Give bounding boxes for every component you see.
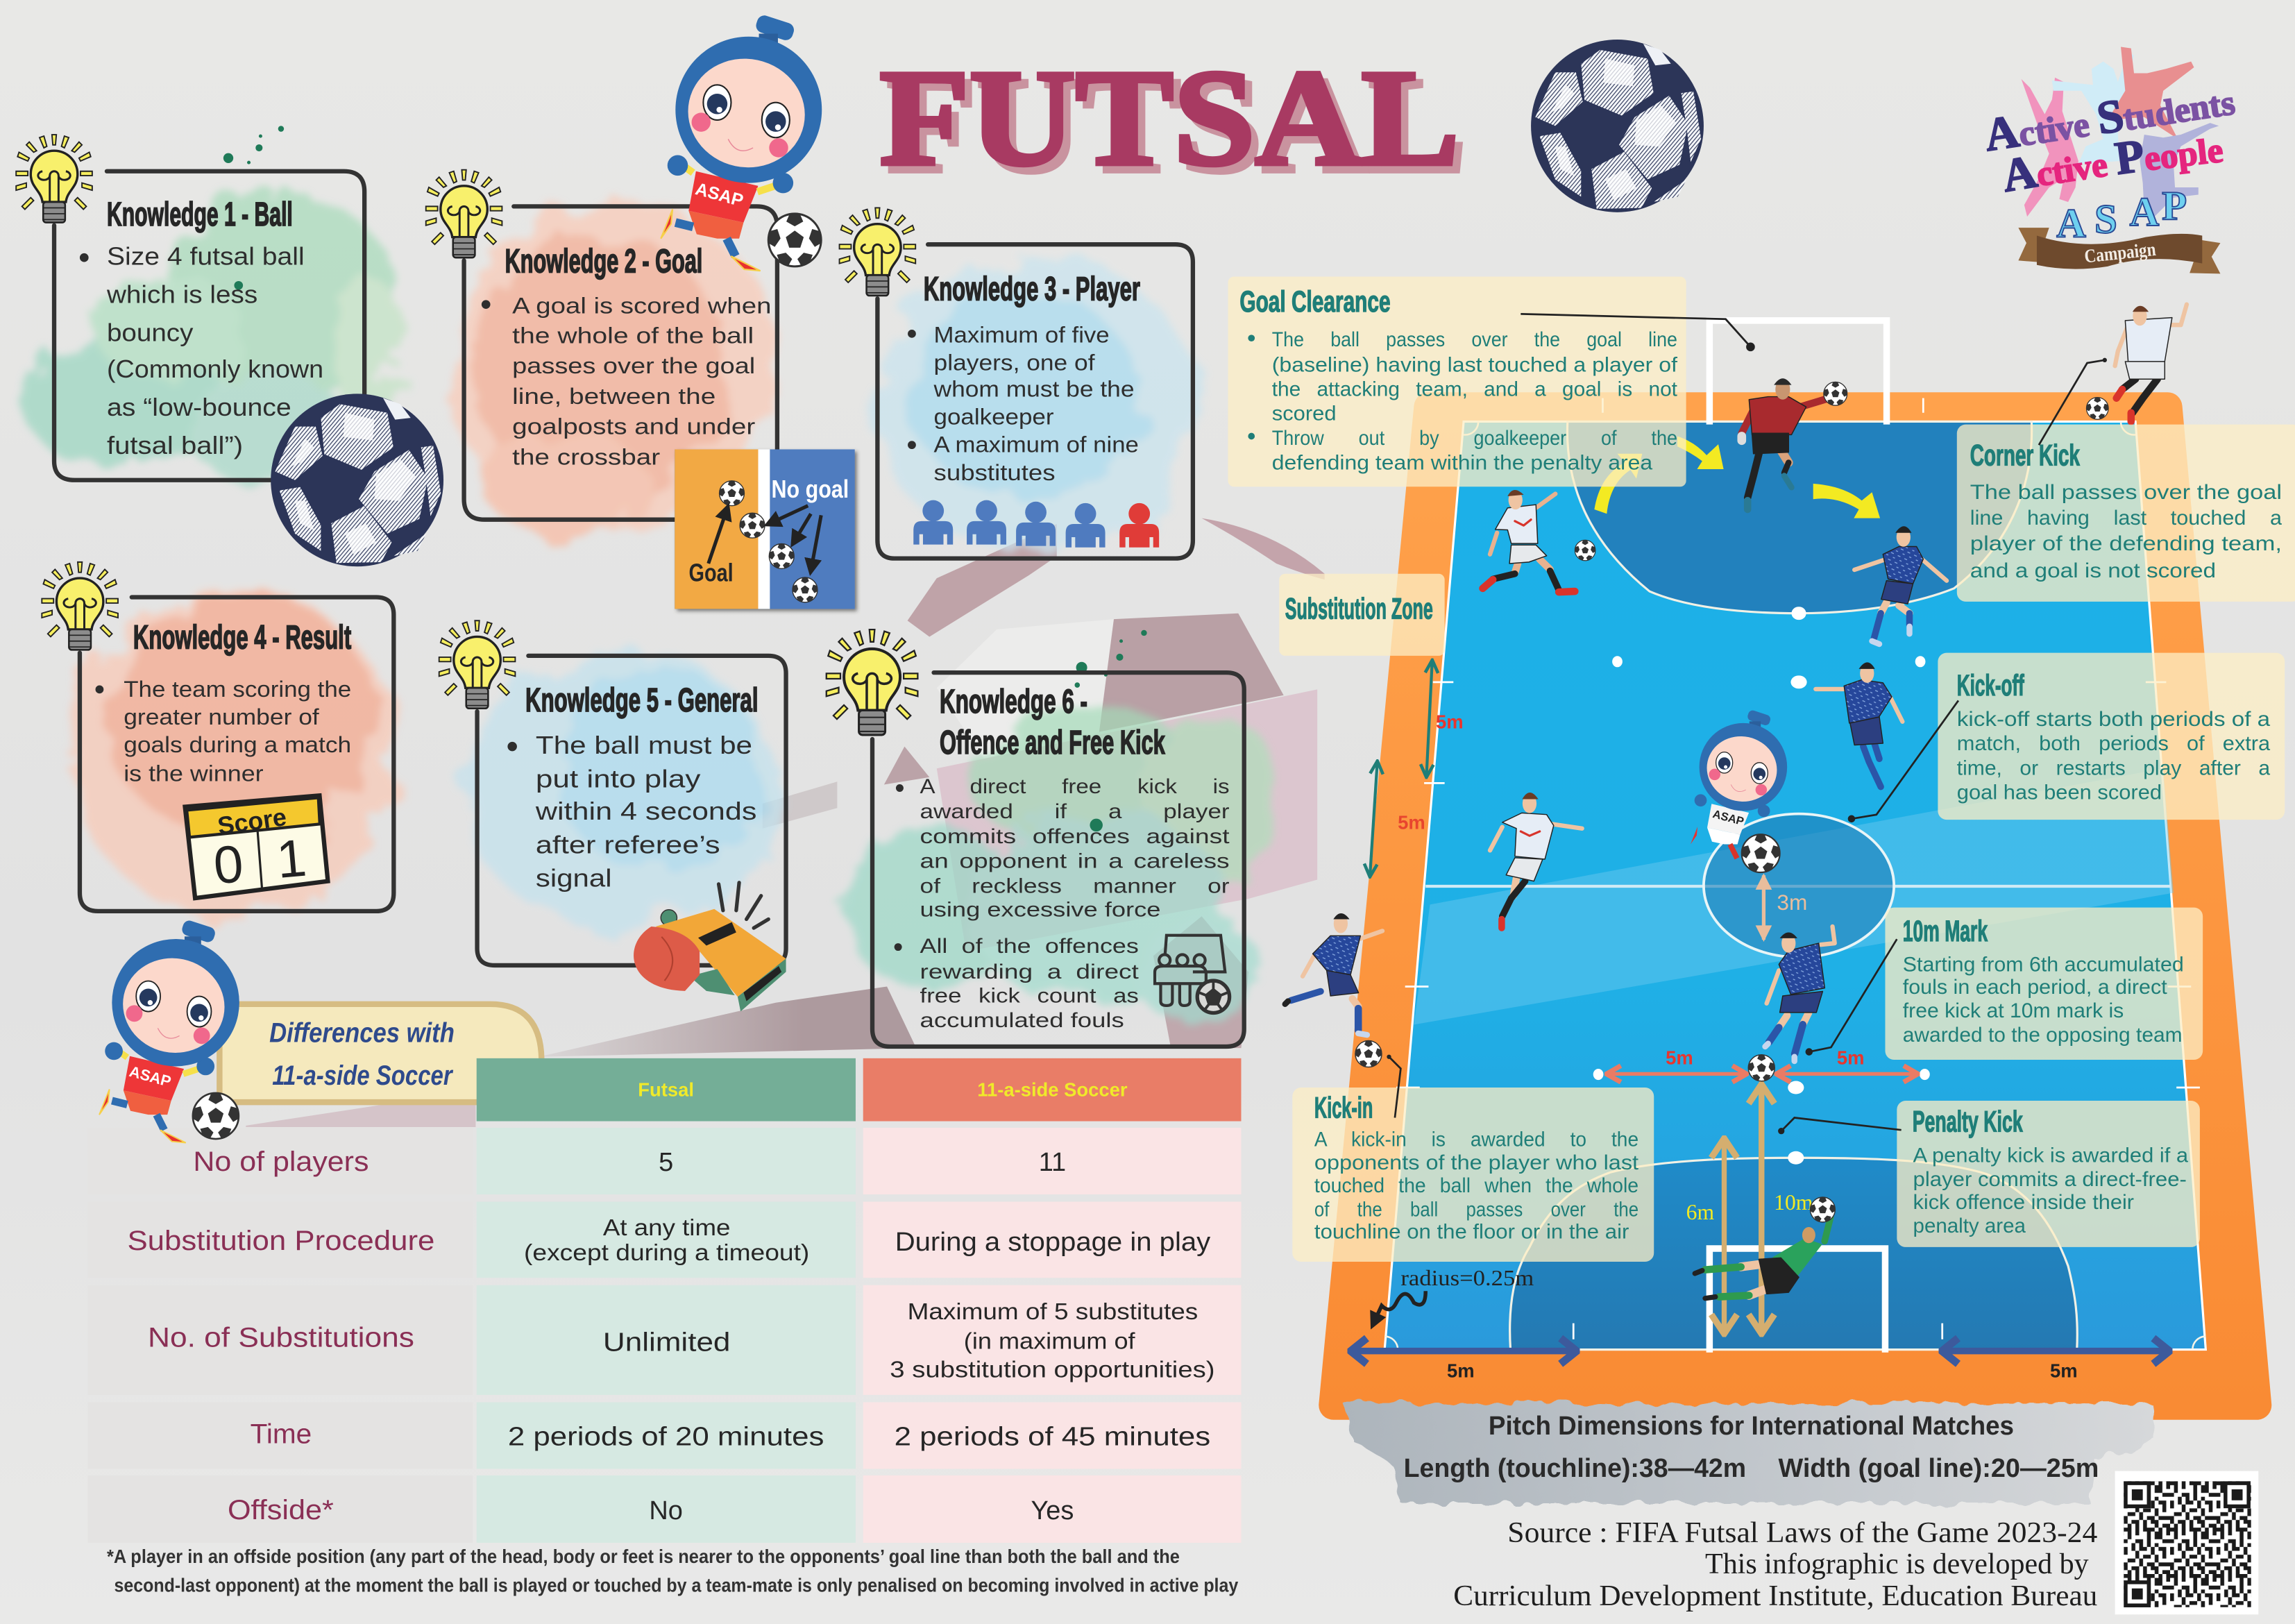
body text: A maximum of nine: [934, 432, 1139, 457]
callout: goal clearance: [1228, 277, 1686, 487]
icon: wall and ball: [1155, 936, 1230, 1013]
watercolour blob: player: [875, 255, 1197, 553]
logo: Active Students Active People ASAP Campaign: Campaign: [2083, 239, 2157, 267]
body text: as “low-bounce: [107, 394, 291, 421]
mascot: top: ASAP: [693, 179, 745, 211]
body text: time, or restarts play after a: [1957, 757, 2271, 780]
body text: [1970, 481, 2283, 582]
logo: Active Students Active People ASAP Campaign: [1986, 47, 2236, 273]
body text: (Commonly known: [107, 355, 323, 383]
body text: of the ball passes over the: [1314, 1199, 1638, 1221]
row: number of substitutions: Unlimited: [603, 1328, 730, 1357]
comparison table: [88, 1058, 1241, 1543]
row: offside: Yes: [1031, 1496, 1074, 1525]
body text: the whole of the ball: [512, 323, 754, 348]
mascot: centre pitch: [1691, 709, 1787, 858]
icon: score board: 1: [274, 829, 309, 890]
row: number of players: No of players: [193, 1147, 369, 1177]
icon: score board: [185, 795, 328, 898]
icon: score board: 0: [211, 834, 246, 895]
body text: player of the defending team,: [1970, 532, 2282, 555]
distance labels: radius=0.25m: [1400, 1266, 1534, 1290]
icon: light bulb: [840, 208, 915, 296]
callout: 10m mark: [1885, 908, 2203, 1060]
body text: line having last touched a: [1970, 507, 2283, 530]
table header: Futsal: [638, 1079, 694, 1101]
body text: player commits a direct-free-: [1913, 1168, 2187, 1191]
row: substitution procedure: During a stoppage in play: [895, 1228, 1210, 1257]
body text: A penalty kick is awarded if a: [1913, 1144, 2189, 1167]
pitch dimensions text: Pitch Dimensions for International Matches: [1489, 1412, 2014, 1441]
player: blue kit centre right: [1815, 662, 1902, 787]
body text: All of the offences: [920, 935, 1139, 958]
row: substitution procedure: Substitution Procedure: [127, 1226, 434, 1256]
callout: kick-off: [1938, 653, 2285, 820]
body text: commits offences against: [920, 825, 1230, 848]
footnote: [107, 1546, 1239, 1596]
body text: [1248, 328, 1678, 474]
QR code: [2115, 1471, 2258, 1614]
body text: [908, 322, 1139, 485]
player: goalkeeper bottom: [1695, 1197, 1835, 1299]
row: number of substitutions: [88, 1285, 1241, 1395]
distance labels: 6m: [1686, 1200, 1714, 1224]
logo: Active Students Active People ASAP Campaign: A: [2130, 189, 2160, 235]
distance labels: 5m: [1436, 711, 1464, 732]
leader lines: [1387, 314, 2107, 1134]
callout: penalty kick: [1897, 1101, 2200, 1247]
heading: Knowledge 3 - Player: [924, 270, 1140, 307]
player: white kit corner: [2086, 305, 2187, 421]
footnote: second-last opponent) at the moment the ball is played or touched by a team-mate is only penalised on becoming involved in active play: [115, 1575, 1239, 1596]
comparison banner: 11-a-side Soccer: [272, 1060, 454, 1091]
body text: goalkeeper: [934, 404, 1054, 430]
pitch dimensions text: Width (goal line):20—25m: [1779, 1454, 2099, 1483]
body text: bouncy: [107, 319, 193, 346]
row: substitution procedure: (except during a timeout): [524, 1240, 809, 1266]
player: white kit left top: [1482, 490, 1595, 592]
faint background football: [246, 518, 1325, 1127]
ball: centre: [1742, 834, 1780, 872]
distance labels: 10m: [1774, 1190, 1813, 1215]
comparison banner: [219, 1004, 541, 1102]
body text: touched the ball when the whole: [1314, 1174, 1638, 1197]
distance labels: 5m: [1447, 1360, 1475, 1382]
watercolour blob: goal: [451, 202, 779, 536]
body text: kick-off starts both periods of a: [1957, 708, 2271, 731]
body text: A kick-in is awarded to the: [1314, 1128, 1638, 1151]
panel: Knowledge 6 - Offence and Free Kick: [827, 629, 1244, 1047]
body text: after referee’s: [536, 831, 720, 859]
heading: Kick-in: [1314, 1091, 1373, 1124]
body text: rewarding a direct: [920, 961, 1139, 983]
body text: substitutes: [934, 459, 1056, 485]
ball: free kick: [1748, 1055, 1775, 1081]
player: goalkeeper top: [1742, 378, 1847, 509]
distance labels: [1398, 711, 2078, 1382]
callout: corner kick: [1957, 425, 2295, 602]
logo: Active Students Active People ASAP Campaign: Active People: [2004, 138, 2224, 193]
logo: Active Students Active People ASAP Campaign: A: [2056, 201, 2086, 246]
body text: within 4 seconds: [535, 797, 756, 825]
heading: 10m Mark: [1903, 915, 1988, 947]
body text: goalposts and under: [512, 413, 755, 439]
body text: [80, 243, 323, 459]
heading line 2: Offence and Free Kick: [940, 724, 1165, 761]
mascot: top: [661, 14, 822, 271]
watercolour blob: offence: [842, 706, 1280, 1024]
body text: The ball passes over the goal line: [1272, 328, 1677, 351]
body text: is the winner: [124, 760, 264, 786]
footnote: *A player in an offside position (any part of the head, body or feet is nearer to the opponents’ goal line than both the ball and the: [107, 1546, 1180, 1567]
icon: five players: [913, 500, 1159, 548]
pitch dimensions text: Length (touchline):38—42m: [1404, 1454, 1746, 1483]
logo: Active Students Active People ASAP Campaign: Active Students: [1986, 96, 2236, 151]
icon: light bulb: [16, 135, 92, 223]
body text: [482, 292, 771, 470]
body text: put into play: [536, 766, 700, 793]
brush background: [1344, 1404, 2158, 1503]
row: number of players: [88, 1128, 1241, 1194]
bottom goal: [1709, 1249, 1885, 1353]
body text: which is less: [106, 281, 257, 309]
title football: [1531, 40, 1704, 212]
row: time: Time: [251, 1419, 312, 1450]
body text: whom must be the: [933, 376, 1135, 402]
top goal: [1709, 321, 1887, 425]
source credits: This infographic is developed by: [1705, 1548, 2089, 1580]
source credits: Source : FIFA Futsal Laws of the Game 2023-24: [1507, 1516, 2097, 1549]
table header: 11-a-side Soccer: [977, 1079, 1128, 1101]
table header: [477, 1058, 1241, 1122]
body text: [507, 731, 756, 892]
body text: awarded if a player: [920, 800, 1230, 823]
body text: [1957, 708, 2271, 804]
body text: defending team within the penalty area: [1272, 451, 1653, 474]
pitch dimensions text: [1404, 1412, 2099, 1483]
comparison banner: Differences with: [269, 1018, 455, 1049]
row: number of substitutions: No. of Substitutions: [148, 1322, 414, 1353]
body text: fouls in each period, a direct: [1903, 976, 2167, 999]
body text: futsal ball”): [107, 432, 243, 459]
top penalty area: [1567, 421, 2032, 614]
panel: Knowledge 4 - Result: [42, 562, 393, 911]
pitch dimensions: [1344, 1404, 2158, 1503]
row: time: 2 periods of 45 minutes: [895, 1423, 1210, 1452]
body text: (baseline) having last touched a player of: [1272, 354, 1678, 377]
playing field: [1384, 421, 2205, 1350]
heading: Goal Clearance: [1239, 285, 1391, 318]
goal / no goal diagram: No goal: [771, 475, 849, 503]
body text: using excessive force: [920, 898, 1160, 921]
row: offside: [88, 1475, 1241, 1543]
row: time: [88, 1402, 1241, 1469]
icon: light bulb: [439, 620, 515, 709]
body text: awarded to the opposing team: [1903, 1024, 2183, 1047]
body text: the attacking team, and a goal is not: [1272, 378, 1677, 401]
row: number of players: 11: [1039, 1148, 1066, 1177]
arrows and distances: [1354, 661, 2166, 1351]
row: number of substitutions: 3 substitution opportunities): [890, 1357, 1215, 1383]
pitch surround: [1333, 407, 2257, 1405]
heading: Knowledge 6 -: [940, 683, 1087, 720]
mascot: table: ASAP: [128, 1063, 173, 1090]
heading: Corner Kick: [1970, 439, 2080, 472]
marks and ticks: [1593, 607, 1930, 1165]
body text: Starting from 6th accumulated: [1903, 954, 2184, 976]
mascot: table: [99, 919, 239, 1143]
body text: A goal is scored when: [512, 292, 771, 318]
body text: [895, 775, 1230, 1032]
jumping silhouettes: [2022, 46, 2219, 217]
body text: The ball must be: [536, 731, 752, 759]
body text: touchline on the floor or in the air: [1314, 1220, 1629, 1243]
body text: goals during a match: [124, 731, 351, 757]
pitch: [1285, 305, 2257, 1405]
row: offside: No: [649, 1496, 683, 1525]
body text: The ball passes over the goal: [1970, 481, 2282, 504]
row: substitution procedure: At any time: [603, 1215, 730, 1241]
goal / no goal diagram: Goal: [689, 559, 734, 586]
distance labels: 5m: [2050, 1360, 2078, 1382]
watercolour blob: result: [70, 590, 398, 917]
icon: light bulb: [42, 562, 118, 650]
body text: The team scoring the: [124, 676, 351, 702]
body text: free kick at 10m mark is: [1903, 999, 2124, 1022]
body text: signal: [536, 864, 612, 892]
player: blue kit right top: [1854, 526, 1947, 644]
panel: Knowledge 5 - General: [439, 620, 786, 1011]
body text: accumulated fouls: [920, 1009, 1124, 1032]
title: FUTSAL: [880, 41, 1459, 194]
logo: Active Students Active People ASAP Campaign: P: [2162, 183, 2187, 228]
icon: score board: Score: [216, 803, 288, 840]
source credits: Curriculum Development Institute, Education Bureau: [1453, 1580, 2097, 1612]
body text: penalty area: [1913, 1215, 2026, 1237]
row: number of players: 5: [659, 1148, 673, 1177]
row: time: 2 periods of 20 minutes: [508, 1423, 824, 1452]
player: blue kit left: [1285, 913, 1382, 1067]
heading: Penalty Kick: [1913, 1105, 2023, 1137]
panel: Knowledge 1 - Ball: [16, 135, 364, 480]
distance labels: 3m: [1777, 890, 1807, 915]
distance labels: 5m: [1837, 1047, 1864, 1068]
heading: Knowledge 1 - Ball: [107, 196, 293, 233]
heading: Kick-off: [1957, 669, 2024, 702]
body text: kick offence inside their: [1913, 1191, 2134, 1214]
paint splatters: [223, 126, 1147, 831]
source credits: [1453, 1516, 2097, 1612]
icon: football: [271, 394, 443, 566]
yellow arrows: [1594, 436, 1880, 518]
bottom penalty area: [1510, 1158, 2077, 1350]
body text: scored: [1272, 402, 1337, 425]
body text: Throw out by goalkeeper of the: [1272, 427, 1677, 450]
body text: [1903, 954, 2184, 1047]
body text: players, one of: [934, 350, 1096, 375]
body text: an opponent in a careless: [920, 850, 1230, 873]
squiggle arrow: [1373, 1291, 1425, 1325]
title: FUTSAL: [887, 49, 1466, 201]
icon: light bulb: [426, 170, 502, 257]
logo: Active Students Active People ASAP Campaign: S: [2094, 196, 2117, 242]
body text: the crossbar: [512, 444, 660, 470]
body text: goal has been scored: [1957, 781, 2162, 804]
centre circle: [1704, 814, 1894, 957]
callout: kick-in: [1292, 1088, 1654, 1262]
watercolour blob: ball: [25, 190, 401, 491]
banner: [2018, 228, 2220, 273]
banner centre: [2037, 234, 2202, 269]
body text: [1913, 1144, 2189, 1237]
row: substitution procedure: [88, 1202, 1241, 1278]
goal / no goal diagram: [675, 449, 855, 609]
body text: match, both periods of extra: [1957, 732, 2271, 755]
mascot: centre pitch: ASAP: [1711, 808, 1745, 828]
body text: opponents of the player who last: [1314, 1151, 1638, 1174]
row: number of substitutions: (in maximum of: [964, 1328, 1135, 1354]
heading: Knowledge 5 - General: [525, 682, 758, 719]
callout: substitution zone: [1279, 574, 1445, 656]
icon: light bulb: [827, 629, 917, 735]
body text: [1314, 1128, 1638, 1243]
callout: substitution zone: Substitution Zone: [1285, 592, 1433, 625]
panel: Knowledge 2 - Goal: [426, 170, 777, 520]
watercolour blob: general: [464, 650, 780, 931]
body text: passes over the goal: [512, 353, 755, 378]
body text: line, between the: [512, 383, 715, 409]
centre line: [1425, 886, 2171, 887]
row: offside: Offside*: [228, 1495, 334, 1525]
body text: [96, 676, 351, 786]
distance labels: 5m: [1398, 811, 1425, 833]
diagonal light band: [1414, 768, 2174, 1024]
body text: greater number of: [124, 704, 320, 729]
panel: Knowledge 3 - Player: [840, 208, 1193, 559]
heading: Knowledge 2 - Goal: [505, 242, 702, 280]
body text: A direct free kick is: [920, 775, 1230, 798]
row: number of substitutions: Maximum of 5 substitutes: [908, 1299, 1198, 1325]
heading: Knowledge 4 - Result: [133, 618, 351, 656]
icon: whistle: [634, 883, 786, 1011]
player: blue kit centre: [1765, 927, 1835, 1061]
body text: Maximum of five: [934, 322, 1110, 348]
body text: Size 4 futsal ball: [107, 243, 305, 271]
distance labels: 5m: [1666, 1047, 1693, 1068]
body text: and a goal is not scored: [1970, 559, 2216, 582]
body text: of reckless manner or: [920, 875, 1230, 898]
body text: free kick count as: [920, 984, 1139, 1007]
player: white kit centre left: [1490, 793, 1582, 928]
